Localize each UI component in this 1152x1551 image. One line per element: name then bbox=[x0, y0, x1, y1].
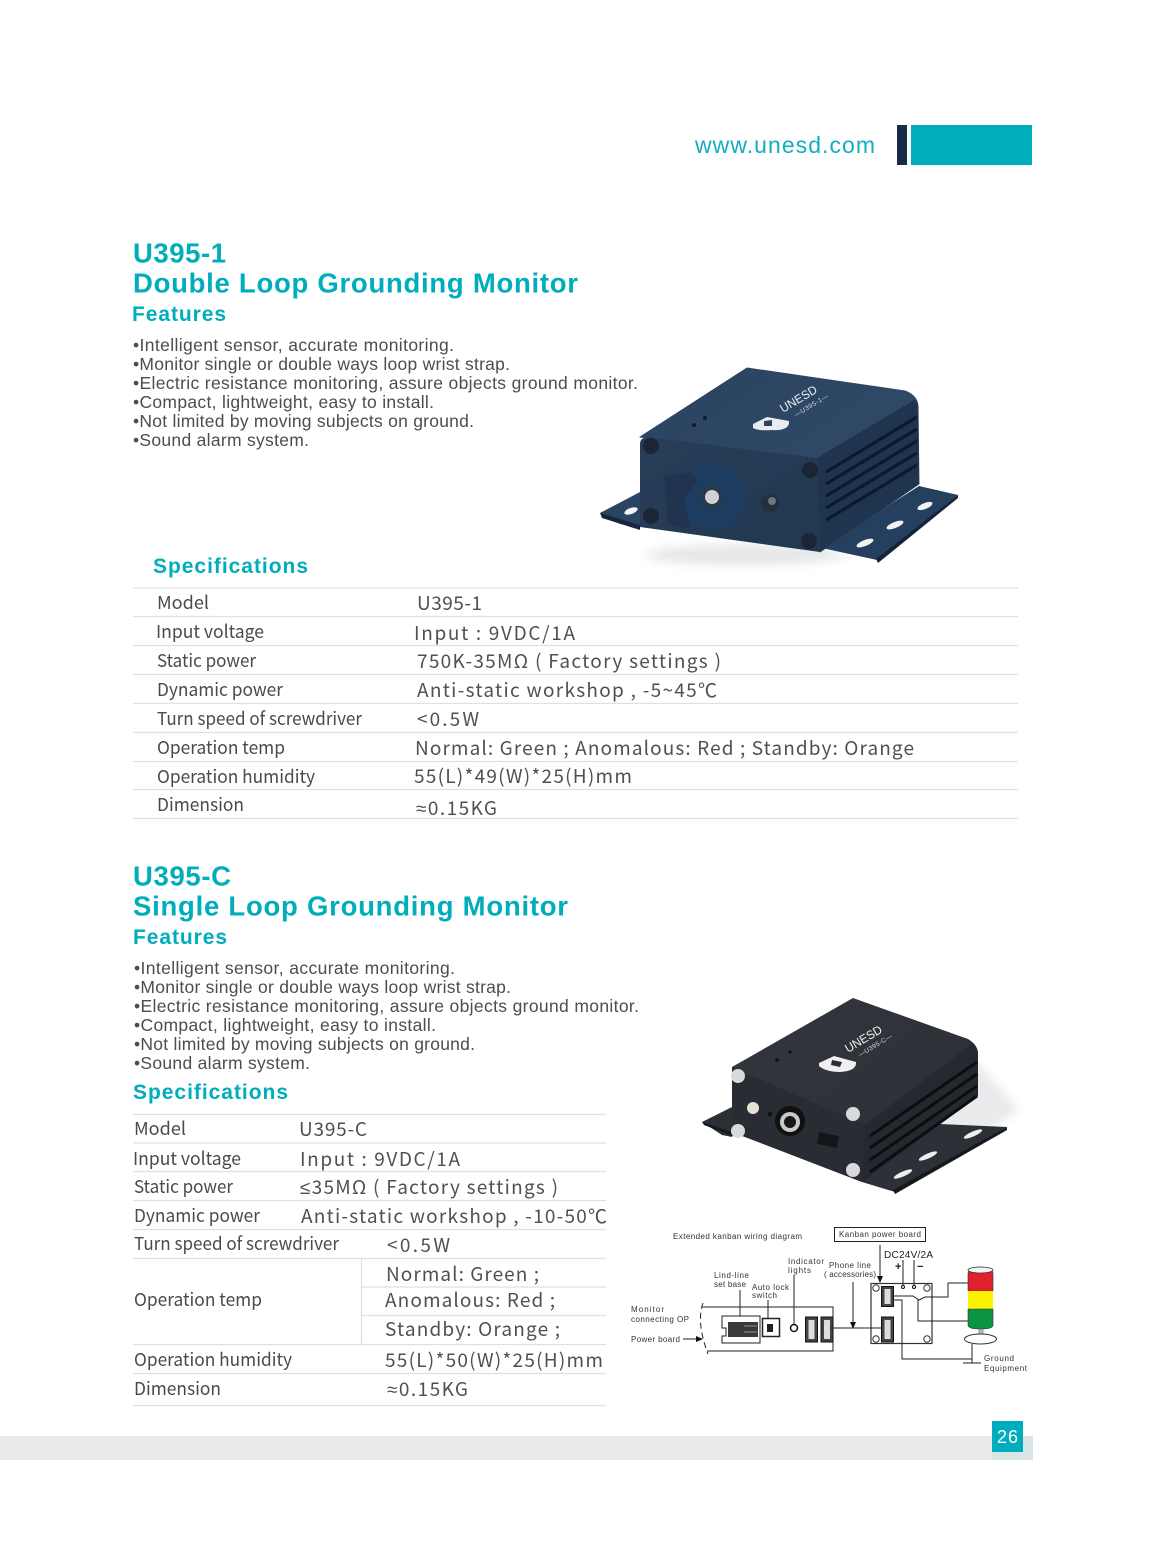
tower light bbox=[963, 1267, 996, 1363]
features list: •Compact, lightweight, easy to install. bbox=[134, 1015, 436, 1035]
diagram labels: Monitor bbox=[631, 1305, 664, 1314]
specifications table: U395-1: Operation humidity bbox=[157, 763, 316, 789]
features list bbox=[134, 958, 639, 1073]
header colour blocks bbox=[897, 125, 1032, 165]
specifications table: U395-C: Turn speed of screwdriver bbox=[134, 1230, 340, 1256]
features list: •Not limited by moving subjects on ground. bbox=[134, 1034, 475, 1054]
section: U395-1 heading bbox=[133, 238, 578, 298]
specifications table: U395-1: 55(L)*49(W)*25(H)mm bbox=[414, 762, 632, 789]
extended board bbox=[700, 1275, 833, 1354]
specifications table: U395-C: Dynamic power bbox=[134, 1202, 261, 1228]
diagram labels: Indicator bbox=[788, 1257, 824, 1266]
specifications table: U395-C: Dimension bbox=[134, 1375, 221, 1401]
diagram labels: Power board bbox=[631, 1335, 680, 1344]
kanban power board: + bbox=[895, 1261, 901, 1273]
kanban power board label: Kanban power board bbox=[839, 1230, 921, 1239]
diagram labels: set base bbox=[714, 1280, 747, 1289]
specifications heading: U395-1: Specifications bbox=[153, 555, 308, 578]
specifications table: U395-1: Dynamic power bbox=[157, 676, 284, 702]
specifications table: U395-C: Anti-static workshop , -10-50℃ bbox=[301, 1202, 607, 1229]
specifications table: U395-1: Anti-static workshop , -5~45℃ bbox=[417, 676, 717, 703]
specifications table: U395-C: 55(L)*50(W)*25(H)mm bbox=[385, 1346, 603, 1373]
specifications table: U395-1: ≈0.15KG bbox=[416, 794, 497, 821]
features list: •Intelligent sensor, accurate monitoring. bbox=[134, 958, 455, 978]
specifications table: U395-C: Static power bbox=[134, 1173, 234, 1199]
features list: •Electric resistance monitoring, assure objects ground monitor. bbox=[133, 373, 638, 393]
specifications table: U395-1: 750K-35MΩ ( Factory settings ) bbox=[417, 647, 721, 674]
kanban power board: − bbox=[917, 1261, 923, 1273]
specifications table: U395-1: U395-1 bbox=[417, 589, 482, 616]
specifications table: U395-1 bbox=[133, 588, 1018, 821]
specifications table: U395-1: <0.5W bbox=[417, 705, 479, 732]
diagram labels: Phone line bbox=[829, 1261, 872, 1270]
specifications table: U395-C: Model bbox=[134, 1115, 186, 1141]
page number: 26 bbox=[997, 1427, 1018, 1447]
kanban power board label bbox=[834, 1228, 926, 1242]
footer band bbox=[0, 1436, 1033, 1460]
specifications table: U395-C: Input : 9VDC/1A bbox=[300, 1145, 460, 1172]
specifications table: U395-1: Operation temp bbox=[157, 734, 285, 760]
specifications table: U395-1: Normal: Green ; Anomalous: Red ; Standby: Orange bbox=[415, 734, 914, 761]
features list bbox=[133, 335, 638, 450]
specifications table: U395-1: Input : 9VDC/1A bbox=[414, 619, 575, 646]
specifications table: U395-C: ≤35MΩ ( Factory settings ) bbox=[300, 1173, 558, 1200]
product photo: U395-1 device: UNESD bbox=[777, 382, 820, 416]
features list: •Sound alarm system. bbox=[134, 1053, 310, 1073]
diagram labels: Auto lock bbox=[752, 1283, 790, 1292]
specifications table: U395-C: <0.5W bbox=[387, 1231, 450, 1258]
specifications table: U395-1: Model bbox=[157, 589, 209, 615]
section: U395-1 heading: U395-1 bbox=[133, 238, 226, 268]
features list: •Intelligent sensor, accurate monitoring. bbox=[133, 335, 454, 355]
page number bbox=[992, 1421, 1023, 1452]
arrows bbox=[683, 1245, 883, 1342]
specifications table: U395-C: Operation temp bbox=[134, 1286, 262, 1312]
voltage label: DC24V/2A bbox=[884, 1250, 933, 1261]
diagram title: Extended kanban wiring diagram bbox=[673, 1232, 802, 1241]
product photo: U395-1 device bbox=[600, 368, 958, 565]
specifications table: U395-C bbox=[133, 1114, 607, 1406]
diagram labels: ( accessories) bbox=[824, 1270, 876, 1279]
specifications table: U395-1: Input voltage bbox=[156, 618, 264, 644]
specifications heading: U395-C: Specifications bbox=[133, 1081, 288, 1104]
features heading: Features bbox=[133, 926, 227, 949]
specifications table: U395-C: U395-C bbox=[299, 1115, 367, 1142]
diagram labels bbox=[631, 1257, 1028, 1373]
features list: •Sound alarm system. bbox=[133, 430, 309, 450]
diagram labels: Equipment bbox=[984, 1364, 1028, 1373]
wiring diagram bbox=[631, 1228, 1028, 1373]
diagram labels: Ground bbox=[984, 1354, 1014, 1363]
specifications table: U395-C: Operation humidity bbox=[134, 1346, 293, 1372]
diagram labels: switch bbox=[752, 1291, 777, 1300]
specifications table: U395-1: Dimension bbox=[157, 791, 244, 817]
specifications table: U395-C: Normal: Green ; bbox=[386, 1260, 539, 1287]
features list: •Monitor single or double ways loop wrist strap. bbox=[133, 354, 510, 374]
features heading: Features bbox=[132, 303, 226, 326]
diagram labels: connecting OP bbox=[631, 1315, 689, 1324]
specifications table: U395-1: Static power bbox=[157, 647, 257, 673]
kanban power board bbox=[830, 1260, 972, 1359]
specifications table: U395-C: Standby: Orange ; bbox=[385, 1315, 560, 1342]
specifications table: U395-C: Input voltage bbox=[133, 1145, 241, 1171]
section: U395-C heading: U395-C bbox=[133, 860, 231, 892]
features list: •Monitor single or double ways loop wrist strap. bbox=[134, 977, 511, 997]
specifications table: U395-C: ≈0.15KG bbox=[387, 1375, 468, 1402]
section: U395-C heading: Single Loop Grounding Monitor bbox=[133, 890, 568, 922]
features list: •Not limited by moving subjects on ground. bbox=[133, 411, 474, 431]
section: U395-C heading bbox=[133, 860, 568, 922]
features list: •Compact, lightweight, easy to install. bbox=[133, 392, 434, 412]
features list: •Electric resistance monitoring, assure objects ground monitor. bbox=[134, 996, 639, 1016]
diagram labels: Lind-line bbox=[714, 1271, 750, 1280]
product photo: U395-C device: UNESD bbox=[842, 1022, 885, 1056]
specifications table: U395-C: Anomalous: Red ; bbox=[385, 1286, 555, 1313]
product photo: U395-C device bbox=[702, 998, 1019, 1194]
product photo: U395-1 device: —U395-1— bbox=[793, 393, 830, 419]
specifications table: U395-1: Turn speed of screwdriver bbox=[157, 705, 363, 731]
product photo: U395-C device: —U395-C— bbox=[857, 1033, 894, 1059]
section: U395-1 heading: Double Loop Grounding Monitor bbox=[133, 268, 578, 298]
website url: www.unesd.com bbox=[694, 132, 875, 158]
diagram labels: lights bbox=[788, 1266, 811, 1275]
